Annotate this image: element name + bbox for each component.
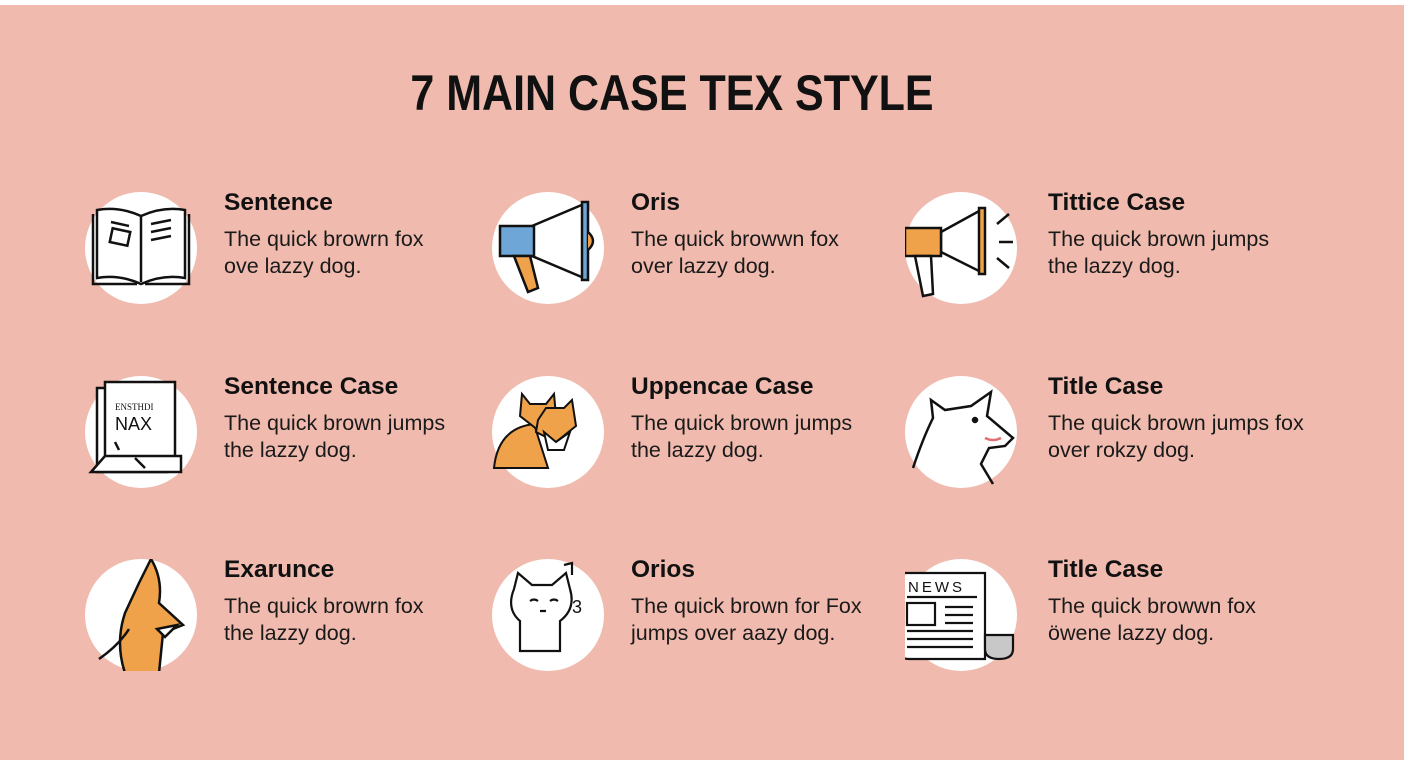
icon: cat [492, 559, 604, 671]
text: Oris: The quick browwn fox [631, 227, 839, 251]
item: Exarunce [85, 556, 424, 671]
item: Sentence Case [85, 373, 445, 488]
icon: book NAX [85, 376, 197, 488]
text: Title Case 1: over rokzy dog. [1048, 438, 1195, 462]
text: Sentence Case: the lazzy dog. [224, 438, 357, 462]
item: Title Case 1 [905, 373, 1304, 488]
text: Orios: Orios [631, 556, 695, 583]
item: Orios [492, 556, 862, 671]
text: Tittice Case: The quick brown jumps [1048, 227, 1269, 251]
item: Sentence [85, 189, 424, 304]
icon: dog [905, 376, 1017, 488]
title: 7 MAIN CASE TEX STYLE [410, 65, 934, 121]
icon: open book [85, 192, 197, 304]
text: Sentence: The quick browrn fox [224, 227, 424, 251]
item: Tittice Case [905, 189, 1269, 304]
icon: book NAX: ENSTHDI [115, 402, 154, 412]
text: Title Case 2 [1048, 556, 1256, 645]
text: Title Case 1 [1048, 373, 1304, 462]
text: Orios [630, 556, 862, 645]
icon: fox sitting [85, 559, 197, 671]
text: Oris [631, 189, 839, 278]
text: Sentence Case: Sentence Case [224, 373, 398, 400]
icon: foxes [492, 376, 604, 488]
text: Sentence Case: The quick brown jumps [224, 411, 445, 435]
text: Orios: The quick brown for Fox [631, 594, 862, 618]
text: Title Case 1: The quick brown jumps fox [1048, 411, 1304, 435]
text: Title Case 2: öwene lazzy dog. [1048, 621, 1214, 645]
text: Exarunce: Exarunce [224, 556, 334, 583]
text: Oris: over lazzy dog. [631, 254, 776, 278]
text: Title Case 1: Title Case [1048, 373, 1163, 400]
item: Oris [492, 189, 839, 304]
text: Title Case 2: Title Case [1048, 556, 1163, 583]
text: Orios: jumps over aazy dog. [631, 621, 835, 645]
text: Exarunce: the lazzy dog. [224, 621, 357, 645]
icon: megaphone blue [492, 192, 604, 304]
icon: book NAX: NAX [115, 414, 152, 434]
text: Exarunce: The quick browrn fox [224, 594, 424, 618]
text: Tittice Case: Tittice Case [1048, 189, 1185, 216]
text: Oris: Oris [631, 189, 680, 216]
text: Title Case 2: The quick browwn fox [1048, 594, 1256, 618]
text: Tittice Case: the lazzy dog. [1048, 254, 1181, 278]
text: Uppencae Case: the lazzy dog. [631, 438, 764, 462]
icon: cat: 3 [572, 597, 582, 617]
text: Uppencae Case: Uppencae Case [631, 373, 813, 400]
icon: newspaper [905, 559, 1017, 671]
text: Sentence [224, 189, 424, 278]
text: Tittice Case [1048, 189, 1269, 278]
icon: megaphone orange [905, 192, 1017, 304]
text: Uppencae Case: The quick brown jumps [631, 411, 852, 435]
text: Uppencae Case [631, 373, 852, 462]
text: Sentence: ove lazzy dog. [224, 254, 361, 278]
text: Exarunce [224, 556, 424, 645]
text: Sentence: Sentence [224, 189, 333, 216]
icon: newspaper: NEWS [908, 579, 965, 596]
text: Sentence Case [224, 373, 445, 462]
item: Title Case 2 [905, 556, 1256, 671]
item: Uppencae Case [492, 373, 852, 488]
